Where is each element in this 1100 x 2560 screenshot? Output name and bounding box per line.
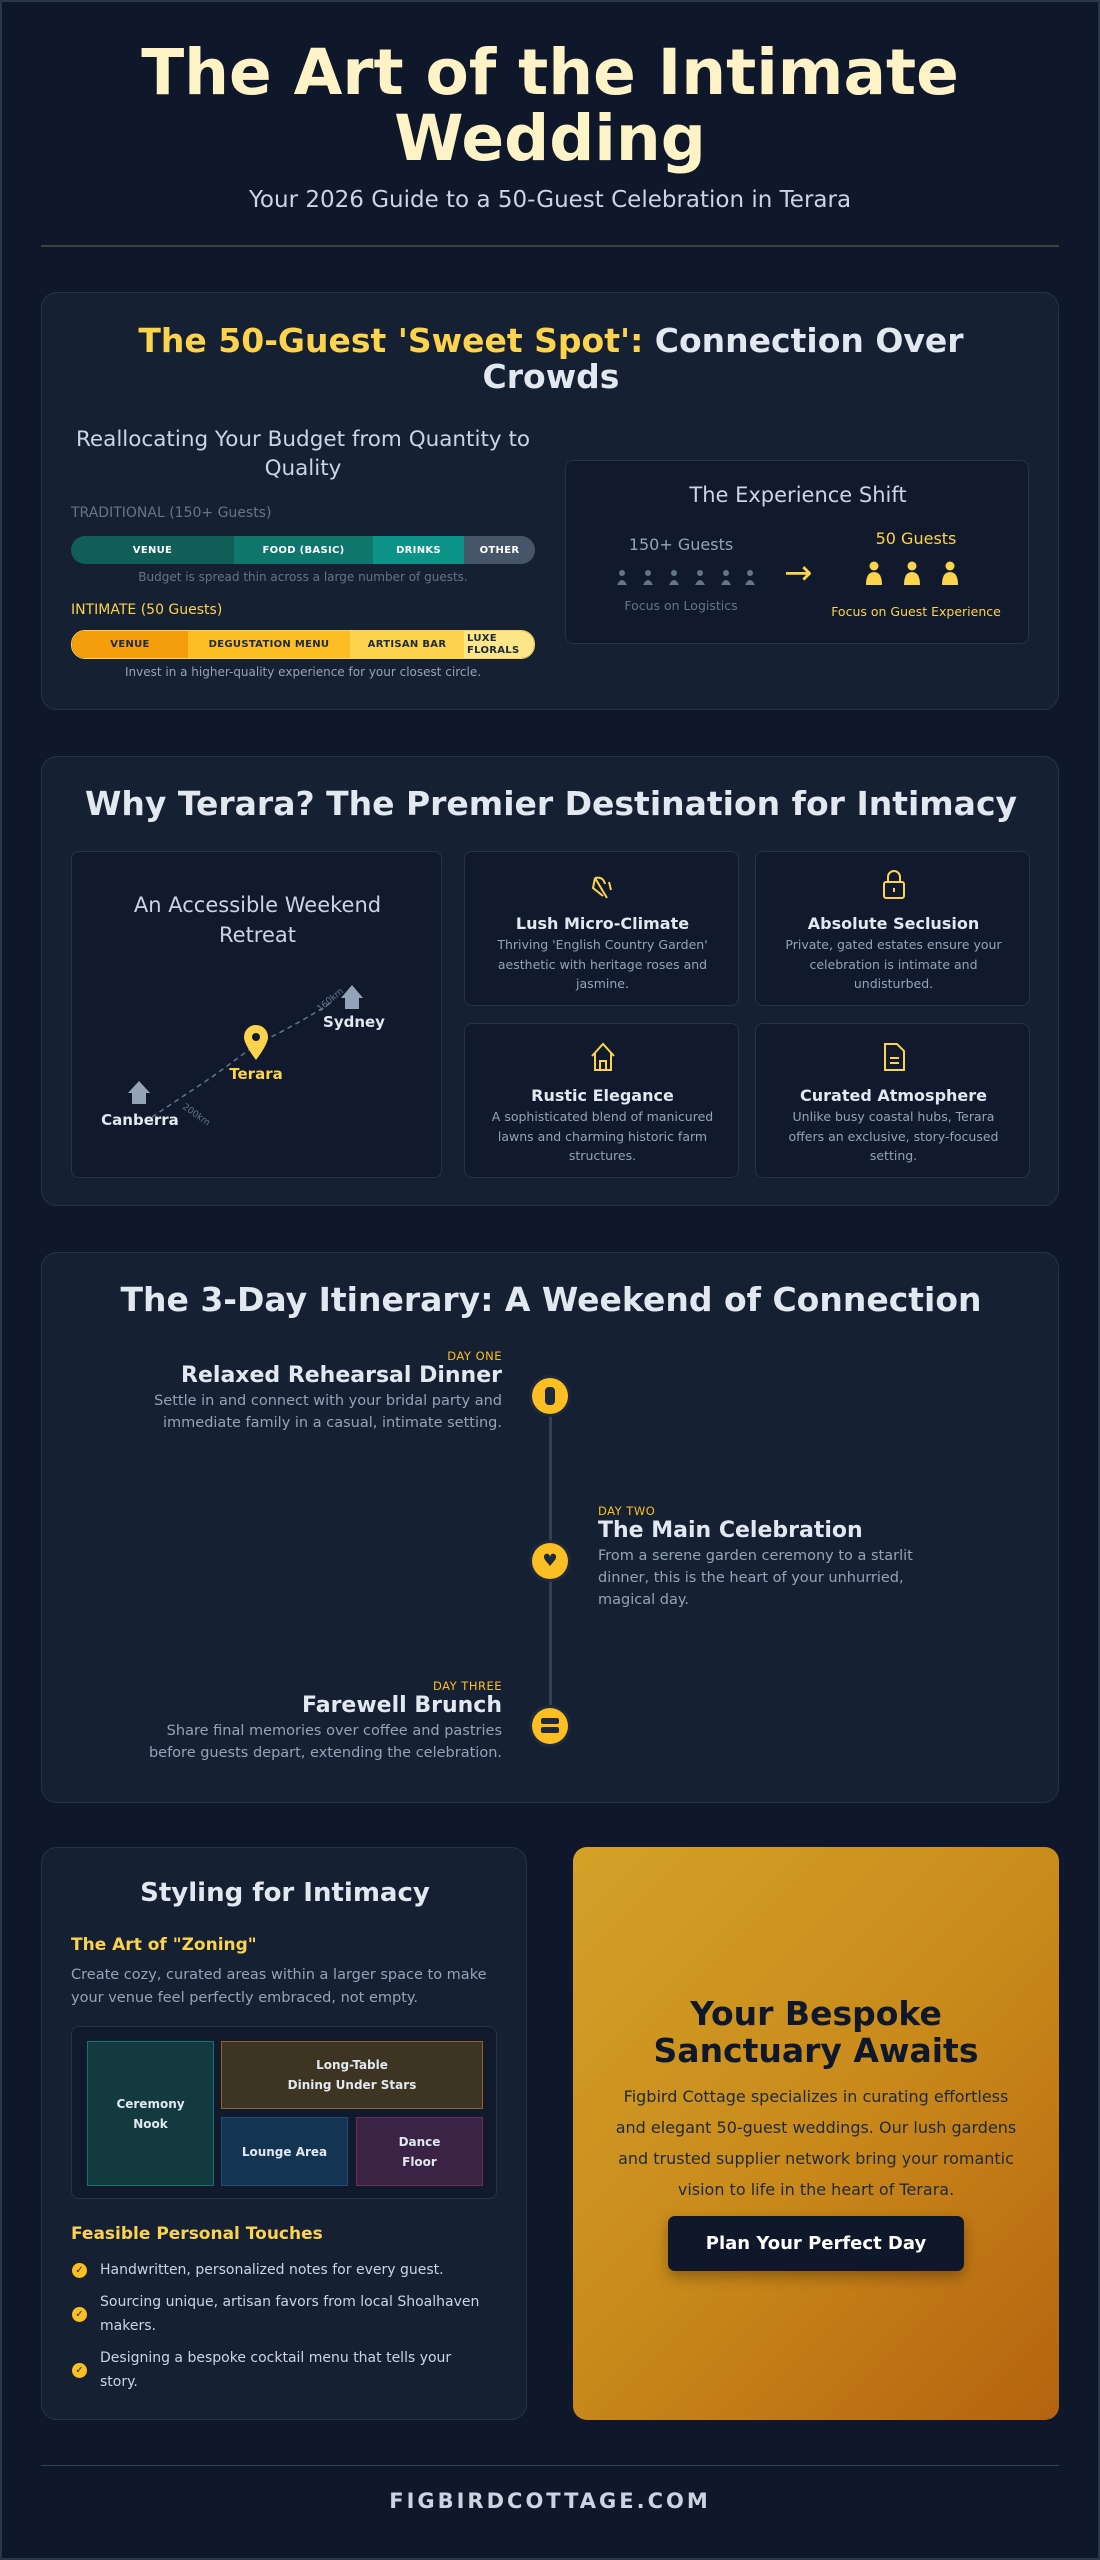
touches list: ✓	[75, 2365, 84, 2376]
day two text: The Main Celebration	[598, 1518, 863, 1543]
icon: day three marker	[532, 1708, 568, 1744]
intimate bar: LUXE	[467, 632, 497, 644]
feature: rustic elegance: Rustic Elegance	[531, 1086, 674, 1105]
button	[668, 2216, 964, 2271]
day one text: Relaxed Rehearsal Dinner	[181, 1363, 502, 1388]
panel: sweet spot	[41, 292, 1059, 710]
touches list: Designing a bespoke cocktail menu that tells your story.	[100, 2350, 451, 2390]
icon: small people	[617, 570, 755, 585]
personal touches heading: Feasible Personal Touches	[71, 2224, 323, 2244]
experience shift box: Focus on Logistics	[624, 598, 738, 613]
day three text	[149, 1679, 502, 1761]
zone: lounge	[221, 2117, 348, 2186]
touches list: ✓	[75, 2265, 84, 2276]
day one text: DAY ONE	[447, 1349, 502, 1363]
cta text: Figbird Cottage specializes in curating effortless and elegant 50-guest weddings. Our lush gardens and trusted supplier network bring your romantic vision to life in the heart of Terara.	[616, 2087, 1016, 2199]
zone: dance: Floor	[402, 2154, 437, 2168]
button: Plan Your Perfect Day	[706, 2233, 926, 2254]
feature: curated atmosphere: Curated Atmosphere	[800, 1086, 987, 1105]
traditional caption: Budget is spread thin across a large number of guests.	[138, 570, 468, 584]
zone: ceremony: Ceremony	[116, 2096, 185, 2110]
map box: Retreat	[219, 923, 296, 947]
arrow: →	[784, 553, 812, 593]
day two text: DAY TWO	[598, 1504, 655, 1518]
intimate bar: ARTISAN BAR	[368, 639, 446, 650]
day three text: Farewell Brunch	[302, 1693, 502, 1718]
feature: curated atmosphere	[755, 1023, 1030, 1178]
heading: The 3-Day Itinerary: A Weekend of Connection	[120, 1280, 982, 1319]
map: Canberra	[101, 1111, 179, 1129]
icon: day two marker	[532, 1543, 568, 1579]
cta heading: Sanctuary Awaits	[654, 2031, 978, 2070]
intimate label: INTIMATE (50 Guests)	[71, 602, 222, 618]
feature: absolute seclusion	[755, 851, 1030, 1006]
zone diagram	[71, 2026, 497, 2199]
zone: lounge: Lounge Area	[242, 2144, 327, 2158]
title: Wedding	[394, 102, 706, 175]
zone: long table	[221, 2041, 483, 2109]
feature: lush micro-climate: Lush Micro-Climate	[516, 914, 689, 933]
map: 160km	[316, 987, 346, 1014]
feature: lush micro-climate: Thriving 'English Country Garden' aesthetic with heritage roses and jasmine.	[497, 937, 708, 991]
150+ guests: 150+ Guests	[629, 535, 733, 554]
day one text	[154, 1349, 502, 1431]
zone: ceremony: Nook	[133, 2116, 168, 2130]
day one text: Settle in and connect with your bridal party and immediate family in a casual, intimate setting.	[154, 1393, 502, 1431]
intimate bar: DEGUSTATION MENU	[209, 639, 329, 650]
cta heading	[654, 1994, 978, 2070]
cta heading: Your Bespoke	[690, 1994, 942, 2033]
feature: lush micro-climate	[464, 851, 739, 1006]
zone: dance: Dance	[399, 2134, 440, 2148]
intimate bar: VENUE	[110, 639, 150, 650]
map box: An Accessible Weekend	[134, 893, 381, 917]
traditional bar: FOOD (BASIC)	[262, 544, 344, 556]
zoning subheading: The Art of "Zoning"	[71, 1935, 257, 1955]
touches list: Sourcing unique, artisan favors from local Shoalhaven makers.	[100, 2294, 479, 2334]
icon: gold people	[866, 562, 958, 585]
day two text: From a serene garden ceremony to a starlit dinner, this is the heart of your unhurried, magical day.	[598, 1548, 913, 1608]
feature: curated atmosphere: Unlike busy coastal hubs, Terara offers an exclusive, story-focused setting.	[789, 1109, 998, 1163]
panel: why terara	[41, 756, 1059, 1206]
map box	[71, 851, 442, 1178]
intimate caption: Invest in a higher-quality experience for your closest circle.	[125, 665, 481, 679]
experience shift box: Focus on Guest Experience	[831, 604, 1001, 619]
heading: Styling for Intimacy	[140, 1878, 430, 1908]
day three text: DAY THREE	[433, 1679, 502, 1693]
zoning description: Create cozy, curated areas within a larger space to make your venue feel perfectly embraced, not empty.	[71, 1967, 486, 2006]
map: Terara	[229, 1065, 283, 1083]
day two text	[598, 1504, 913, 1608]
touches list: ✓	[75, 2309, 84, 2320]
icon: day one marker	[532, 1378, 568, 1414]
touches list	[72, 2262, 479, 2390]
map	[101, 985, 385, 1129]
heading	[138, 321, 964, 396]
map: Sydney	[323, 1013, 385, 1031]
panel: itinerary	[41, 1252, 1059, 1803]
traditional bar: DRINKS	[396, 544, 441, 556]
experience shift box: The Experience Shift	[689, 483, 907, 507]
feature: rustic elegance: A sophisticated blend of manicured lawns and charming historic farm structures.	[492, 1109, 713, 1163]
intimate bar	[71, 630, 535, 659]
50 guests: 50 Guests	[876, 529, 956, 548]
intimate bar: FLORALS	[467, 644, 519, 656]
map: 200km	[180, 1102, 212, 1128]
icon: day two marker: ♥	[542, 1551, 558, 1571]
heading: Crowds	[483, 357, 619, 396]
panel: styling for intimacy	[41, 1847, 527, 2420]
heading: The 50-Guest 'Sweet Spot': Connection Over	[138, 321, 964, 360]
subtitle: Your 2026 Guide to a 50-Guest Celebration in Terara	[249, 187, 851, 213]
title	[141, 36, 959, 175]
traditional bar	[71, 536, 535, 564]
touches list: Handwritten, personalized notes for every guest.	[100, 2262, 444, 2278]
title: The Art of the Intimate	[141, 36, 959, 109]
traditional bar: VENUE	[133, 544, 172, 556]
zone: dance	[356, 2117, 483, 2186]
zone: ceremony	[87, 2041, 214, 2186]
feature: rustic elegance	[464, 1023, 739, 1178]
traditional label: TRADITIONAL (150+ Guests)	[71, 505, 271, 521]
heading: Why Terara? The Premier Destination for Intimacy	[85, 784, 1017, 823]
day three text: Share final memories over coffee and pastries before guests depart, extending the celebration.	[149, 1723, 502, 1761]
footer: FIGBIRDCOTTAGE.COM	[389, 2489, 711, 2513]
traditional bar: OTHER	[480, 544, 519, 556]
zone: long table: Long-Table	[316, 2058, 388, 2072]
budget subheading: Reallocating Your Budget from Quantity to Quality	[76, 427, 530, 481]
panel: call to action	[573, 1847, 1059, 2420]
feature: absolute seclusion: Private, gated estates ensure your celebration is intimate and undisturbed.	[785, 937, 1002, 991]
zone: long table: Dining Under Stars	[288, 2078, 416, 2092]
experience shift box	[565, 460, 1029, 644]
feature: absolute seclusion: Absolute Seclusion	[808, 914, 979, 933]
